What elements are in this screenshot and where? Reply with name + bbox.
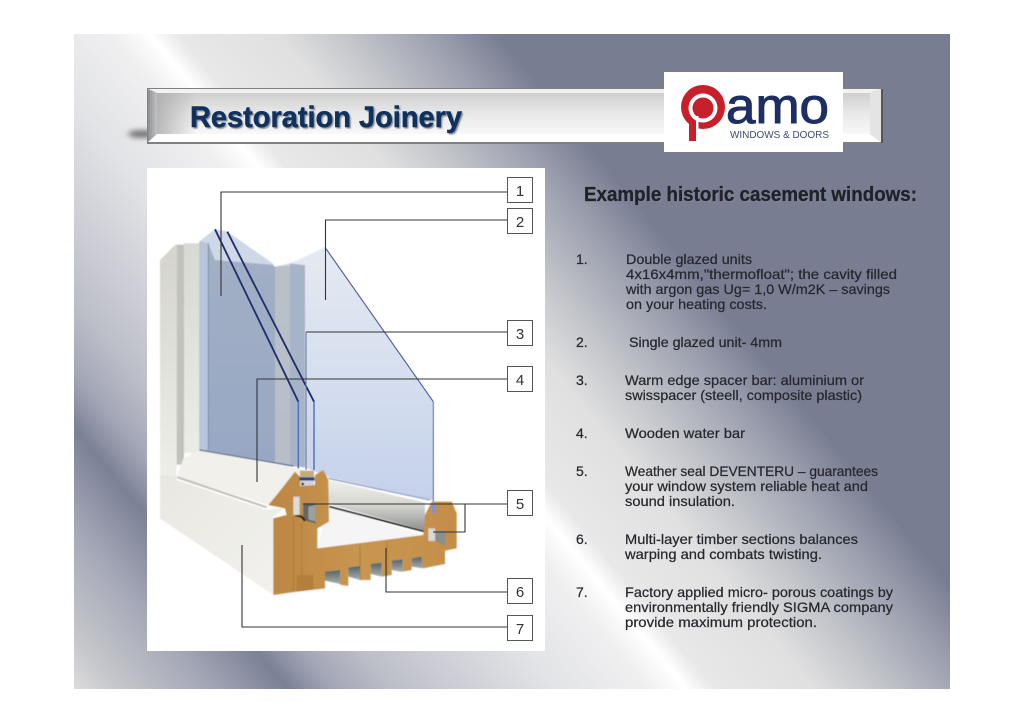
list item 7: environmentally friendly SIGMA company (625, 599, 893, 615)
heading: Restoration Joinery: Restoration Joinery (190, 101, 463, 134)
heading: Example historic casement windows: Example historic casement windows: (584, 183, 917, 206)
sill (160, 475, 285, 595)
logo: Pamo Windows & Doors (664, 72, 843, 152)
slide background (74, 34, 950, 689)
list item 5: sound insulation. (625, 493, 735, 509)
list item 6: warping and combats twisting. (624, 546, 822, 562)
list item 2: Single glazed unit- 4mm (629, 334, 782, 350)
number tags: 3 (516, 326, 524, 343)
icon: red p mark (681, 85, 725, 141)
list item 5 (576, 463, 878, 509)
list item 7: provide maximum protection. (625, 614, 817, 630)
number tags: 2 (516, 214, 524, 231)
tagline: WINDOWS & DOORS (730, 130, 829, 141)
list item 4: 4. (576, 425, 588, 441)
list item 6 (576, 531, 858, 562)
list item 7: Factory applied micro- porous coatings by (625, 584, 893, 600)
timber section and interior rail (268, 470, 457, 595)
number tags: 4 (516, 372, 524, 389)
sash bar (177, 450, 307, 505)
list item 7 (576, 584, 893, 630)
list item 1: 4x16x4mm,"thermofloat"; the cavity filled (626, 266, 897, 282)
timber slots (325, 557, 423, 584)
list item 1 (576, 251, 897, 312)
list item 7: 7. (576, 584, 588, 600)
list item 5: Weather seal DEVENTERU – guarantees (625, 463, 878, 479)
list item 2: 2. (576, 334, 588, 350)
panel: window cross-section diagram (147, 168, 545, 651)
list item 5: your window system reliable heat and (625, 478, 868, 494)
number tags: 5 (516, 496, 524, 513)
list item 5: 5. (576, 463, 588, 479)
leader lines (221, 192, 507, 627)
list item 4: Wooden water bar (625, 425, 745, 441)
glass edges (215, 229, 433, 502)
list item 3: Warm edge spacer bar: aluminium or (625, 372, 864, 388)
heading: Example historic casement windows: Example historic casement windows: (585, 184, 918, 207)
number tags (508, 178, 532, 640)
number tags: 6 (516, 584, 524, 601)
illustration: window section (160, 229, 457, 595)
wordmark: amo (726, 78, 829, 134)
number tags: 7 (516, 621, 524, 638)
title banner (128, 88, 883, 144)
list item 3: 3. (576, 372, 588, 388)
list item 3 (576, 372, 864, 403)
list item 1: on your heating costs. (626, 296, 767, 312)
cavities and seals (303, 503, 316, 523)
number tags: 1 (516, 183, 524, 200)
list item 4 (576, 425, 745, 441)
list item 3: swisspacer (steell, composite plastic) (625, 387, 862, 403)
list item 1: with argon gas Ug= 1,0 W/m2K – savings (625, 281, 890, 297)
list item 1: 1. (576, 251, 588, 267)
front glass pane (290, 247, 433, 501)
list item 1: Double glazed units (626, 251, 752, 267)
heading: Restoration Joinery: Restoration Joinery (192, 102, 464, 136)
list item 6: Multi-layer timber sections balances (625, 531, 858, 547)
list item 6: 6. (576, 531, 588, 547)
